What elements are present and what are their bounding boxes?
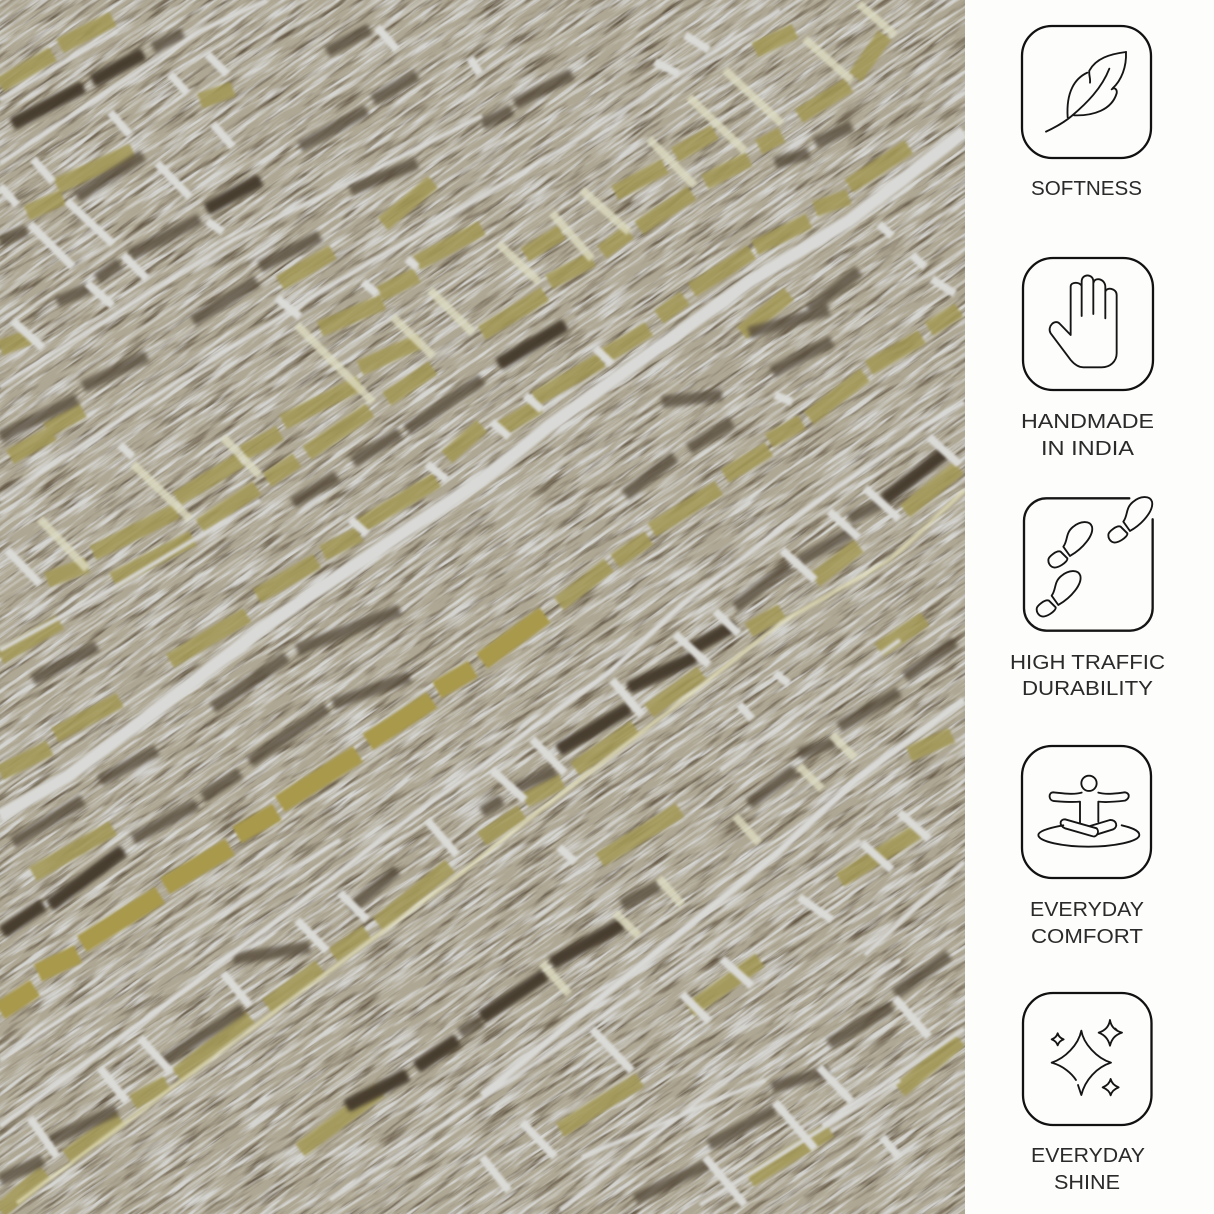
label: everyday shine: EVERYDAY bbox=[1031, 1145, 1145, 1167]
label: handmade in india bbox=[1021, 411, 1154, 460]
icon: feather bbox=[1022, 26, 1151, 158]
white cross ties bbox=[0, 27, 959, 1205]
feature: everyday comfort bbox=[1022, 746, 1151, 948]
yellow bottom band segments bbox=[0, 615, 545, 1011]
label: handmade in india: HANDMADE bbox=[1021, 411, 1154, 433]
label: handmade in india: IN INDIA bbox=[1041, 438, 1135, 460]
label: softness: SOFTNESS bbox=[1031, 178, 1142, 200]
label: everyday shine: SHINE bbox=[1054, 1172, 1120, 1194]
strongest dark weave blocks bbox=[3, 54, 945, 1106]
dark weave blocks bbox=[0, 29, 955, 1199]
white warp lines bbox=[0, 0, 964, 1210]
icon: sparkles bbox=[1023, 993, 1152, 1125]
photo: woven rug texture bbox=[0, 0, 965, 1214]
panel: feature list bbox=[965, 0, 1214, 1214]
label: high traffic durability bbox=[1010, 652, 1165, 700]
label: everyday comfort: COMFORT bbox=[1031, 926, 1143, 948]
label: high traffic durability: HIGH TRAFFIC bbox=[1010, 652, 1165, 674]
label: everyday shine bbox=[1031, 1145, 1145, 1194]
feature: handmade in india bbox=[1021, 258, 1154, 460]
icon: meditating person bbox=[1022, 746, 1151, 878]
feature: high traffic durability bbox=[1010, 497, 1165, 700]
pale olive weave blocks bbox=[0, 19, 960, 1211]
cream warp line bbox=[17, 490, 965, 1203]
label: everyday comfort bbox=[1030, 899, 1144, 948]
feature: everyday shine bbox=[1023, 993, 1152, 1194]
cream cross ties bbox=[40, 4, 895, 994]
label: high traffic durability: DURABILITY bbox=[1022, 678, 1153, 700]
icon: footprints bbox=[1024, 497, 1153, 631]
icon: hand bbox=[1023, 258, 1153, 390]
label: everyday comfort: EVERYDAY bbox=[1030, 899, 1144, 921]
feature: softness bbox=[1022, 26, 1151, 200]
